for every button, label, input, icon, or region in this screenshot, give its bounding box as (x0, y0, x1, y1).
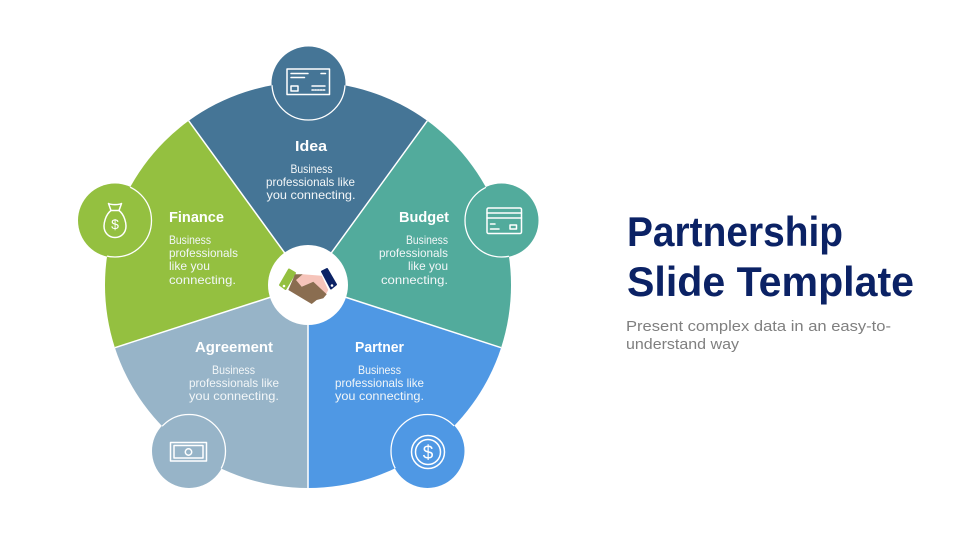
pentagon pie diagram (78, 46, 538, 488)
center handshake icon (268, 245, 348, 325)
label: partner (335, 340, 424, 403)
label: partner: Business (358, 363, 401, 377)
label: agreement (189, 340, 279, 403)
subtitle (626, 318, 891, 353)
segment: idea (189, 82, 427, 285)
label: budget: Business (406, 233, 448, 247)
label: idea: Business (290, 162, 333, 176)
label: budget: connecting. (381, 273, 448, 287)
segment: finance (105, 121, 308, 348)
icon badge: partner coin (390, 414, 464, 488)
label: partner: Partner (355, 340, 404, 356)
segment: partner (308, 285, 501, 488)
segment: agreement (115, 285, 308, 488)
label: finance (169, 210, 238, 287)
icon badge: finance money bag (78, 184, 152, 258)
label: partner: you connecting. (335, 389, 424, 403)
title: Slide Template (627, 258, 914, 305)
icon badge: finance money bag: $ (111, 216, 119, 232)
segment: budget (308, 121, 511, 348)
label: budget: like you (408, 259, 448, 273)
label: agreement: professionals like (189, 376, 279, 390)
label: finance: professionals (169, 246, 238, 260)
label: agreement: you connecting. (189, 389, 279, 403)
icon badge: agreement banknote (152, 414, 226, 488)
label: idea: you connecting. (266, 188, 356, 202)
label: finance: like you (169, 259, 210, 273)
label: idea: Idea (295, 139, 328, 155)
label: budget: Budget (399, 210, 449, 226)
label: finance: Finance (169, 210, 224, 226)
label: idea: professionals like (266, 175, 355, 189)
label: partner: professionals like (335, 376, 424, 390)
title (627, 208, 914, 305)
title: Partnership (627, 208, 843, 255)
icon badge: partner coin: $ (423, 443, 434, 464)
label: agreement: Business (212, 363, 255, 377)
label: budget: professionals (379, 246, 448, 260)
label: agreement: Agreement (195, 340, 273, 356)
subtitle: understand way (626, 336, 740, 353)
label: finance: connecting. (169, 273, 236, 287)
label: finance: Business (169, 233, 211, 247)
label: budget (379, 210, 449, 287)
label: idea (266, 139, 356, 202)
icon badge: idea card (272, 46, 346, 120)
icon badge: budget credit card (464, 184, 538, 258)
subtitle: Present complex data in an easy-to- (626, 318, 891, 335)
